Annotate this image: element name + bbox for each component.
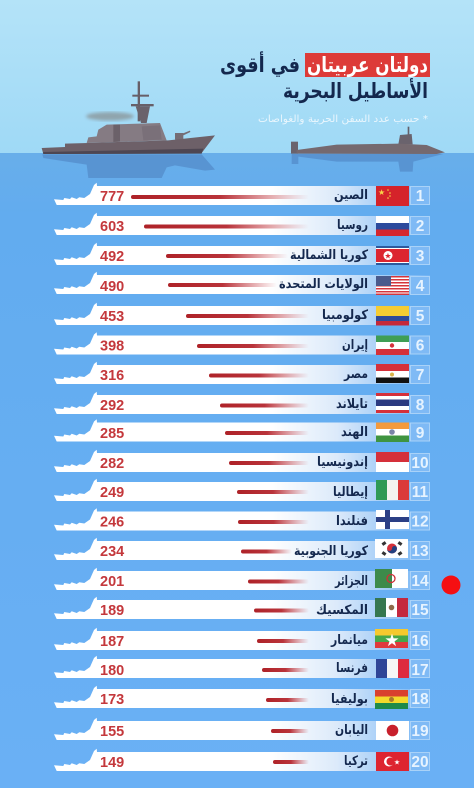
- row 9 India: [54, 419, 430, 442]
- ship hull: [54, 628, 97, 650]
- row 15 Mexico: المكسيك: [316, 603, 368, 618]
- flag: [376, 752, 409, 771]
- row 10 Indonesia: 282: [100, 456, 124, 472]
- row 19 Japan: 19: [411, 723, 429, 740]
- row 1 China: 1: [416, 188, 425, 205]
- row 6 Iran: إيران: [342, 338, 368, 353]
- row 12 Finland: [54, 508, 430, 530]
- row 8 Thailand: [54, 392, 430, 414]
- flag: [376, 276, 409, 295]
- row 5 Colombia: كولومبيا: [322, 308, 368, 323]
- title line 1 dark: في أقوى: [220, 50, 300, 77]
- row 14 Algeria: 201: [100, 574, 124, 590]
- row 8 Thailand: 292: [100, 398, 124, 414]
- row 4 United States: الولايات المتحدة: [279, 277, 368, 292]
- ship hull: [54, 272, 97, 294]
- flag: [376, 659, 409, 678]
- row 15 Mexico: 189: [100, 603, 124, 619]
- row 18 Bolivia: 18: [411, 691, 429, 708]
- ship hull: [54, 508, 97, 530]
- row 3 North Korea: [54, 243, 430, 265]
- row 14 Algeria: [54, 568, 430, 590]
- flag: [376, 510, 409, 529]
- flag: ★: [378, 188, 385, 197]
- row 14 Algeria: 14: [411, 573, 429, 590]
- flag: [376, 336, 409, 355]
- row 7 Egypt: 7: [416, 367, 424, 384]
- row 17 France: [54, 656, 430, 679]
- row 16 Myanmar: ميانمار: [330, 633, 368, 648]
- row 4 United States: 490: [100, 279, 124, 295]
- warship: [42, 81, 215, 154]
- row 13 South Korea: [54, 538, 430, 560]
- ship hull: [54, 332, 97, 354]
- flag: ★: [394, 758, 400, 766]
- row 2 Russia: 2: [416, 218, 424, 235]
- row 5 Colombia: 453: [100, 309, 124, 325]
- ship hull: [54, 213, 97, 235]
- row 7 Egypt: [54, 362, 430, 384]
- row 4 United States: [54, 272, 430, 295]
- flag: [375, 598, 408, 617]
- subtitle: * حسب عدد السفن الحربية والغواصات: [258, 114, 428, 125]
- row 20 Turkey: تركيا: [344, 754, 368, 769]
- row 20 Turkey: [54, 749, 430, 771]
- row 17 France: 17: [411, 662, 429, 679]
- row 16 Myanmar: 16: [411, 633, 429, 650]
- row 20 Turkey: 149: [100, 755, 124, 771]
- row 9 India: 9: [416, 425, 425, 442]
- flag: [376, 306, 409, 326]
- row 7 Egypt: 316: [100, 368, 124, 384]
- ship hull: [54, 597, 97, 619]
- row 19 Japan: اليابان: [335, 723, 368, 738]
- row 10 Indonesia: [54, 450, 430, 472]
- title: [220, 50, 430, 103]
- row 6 Iran: [54, 332, 430, 355]
- flag: [376, 422, 409, 442]
- flag: [376, 364, 409, 383]
- flag: ★: [384, 252, 392, 260]
- ship hull: [54, 568, 97, 590]
- row 10 Indonesia: 10: [411, 455, 429, 472]
- row 14 Algeria: الجزائر: [334, 574, 368, 589]
- row 1 China: الصين: [334, 188, 368, 203]
- row 16 Myanmar: [54, 628, 430, 651]
- ship hull: [54, 656, 97, 678]
- ship hull: [54, 303, 97, 325]
- row 10 Indonesia: إندونيسيا: [317, 455, 368, 470]
- ship hull: [54, 718, 97, 740]
- row 20 Turkey: 20: [411, 754, 429, 771]
- row 8 Thailand: 8: [416, 397, 425, 414]
- flag: [376, 246, 409, 265]
- row 11 Italy: 249: [100, 485, 124, 501]
- row 3 North Korea: 3: [416, 248, 425, 265]
- row 11 Italy: إيطاليا: [333, 485, 368, 500]
- row 11 Italy: [54, 479, 430, 501]
- flag: [376, 216, 409, 236]
- ship hull: [54, 479, 97, 501]
- row 6 Iran: 6: [416, 338, 425, 354]
- row 9 India: 285: [100, 426, 124, 442]
- ship hull: [54, 686, 97, 708]
- flag: [375, 539, 408, 558]
- red marker dot: [442, 576, 460, 594]
- row 17 France: فرنسا: [336, 661, 368, 676]
- row 15 Mexico: [54, 597, 430, 619]
- row 9 India: الهند: [341, 425, 368, 440]
- row 16 Myanmar: 187: [100, 634, 124, 650]
- row 13 South Korea: 234: [100, 544, 124, 560]
- row 18 Bolivia: بوليفيا: [331, 692, 368, 707]
- row 1 China: [54, 183, 430, 206]
- row 6 Iran: 398: [100, 338, 124, 354]
- row 19 Japan: 155: [100, 724, 124, 740]
- row 19 Japan: [54, 718, 430, 740]
- flag: [375, 569, 408, 588]
- row 12 Finland: 246: [100, 514, 124, 530]
- flag: [376, 393, 409, 413]
- row 3 North Korea: كوريا الشمالية: [290, 248, 368, 263]
- row 13 South Korea: كوريا الجنوبية: [294, 544, 368, 559]
- title highlight: [305, 53, 430, 77]
- row 8 Thailand: تايلاند: [336, 397, 368, 412]
- sky background: [0, 0, 474, 154]
- warship reflection: [42, 154, 215, 178]
- row 1 China: 777: [100, 189, 124, 205]
- flag: [376, 452, 409, 472]
- ship hull: [54, 749, 97, 771]
- row 18 Bolivia: 173: [100, 692, 124, 708]
- flag: [375, 629, 408, 651]
- row 7 Egypt: مصر: [343, 367, 368, 382]
- row 2 Russia: روسيا: [337, 218, 368, 233]
- flag: [375, 690, 408, 709]
- flag: ★: [384, 631, 400, 651]
- row 5 Colombia: [54, 303, 430, 326]
- ship hull: [54, 243, 97, 265]
- submarine: [291, 127, 445, 154]
- row 4 United States: 4: [416, 278, 425, 295]
- row 12 Finland: 12: [411, 514, 429, 530]
- ship hull: [54, 392, 97, 414]
- title line 1 red: دولتان عربيتان: [307, 53, 428, 77]
- row 18 Bolivia: [54, 686, 430, 709]
- ship hull: [54, 538, 97, 560]
- row 11 Italy: 11: [412, 484, 429, 501]
- row 15 Mexico: 15: [411, 602, 429, 619]
- row 12 Finland: فنلندا: [336, 514, 368, 529]
- row 5 Colombia: 5: [416, 308, 425, 325]
- submarine reflection: [292, 154, 443, 172]
- ship hull: [54, 183, 97, 205]
- ship hull: [54, 419, 97, 442]
- flag: [376, 721, 409, 740]
- title line 2: الأساطيل البحرية: [283, 77, 428, 103]
- row 2 Russia: 603: [100, 219, 124, 235]
- row 17 France: 180: [100, 663, 124, 679]
- row 2 Russia: [54, 213, 430, 236]
- flag: [376, 186, 409, 206]
- row 3 North Korea: 492: [100, 249, 124, 265]
- ship hull: [54, 450, 97, 472]
- row 13 South Korea: 13: [411, 543, 429, 560]
- flag: [376, 480, 409, 500]
- ship hull: [54, 362, 97, 384]
